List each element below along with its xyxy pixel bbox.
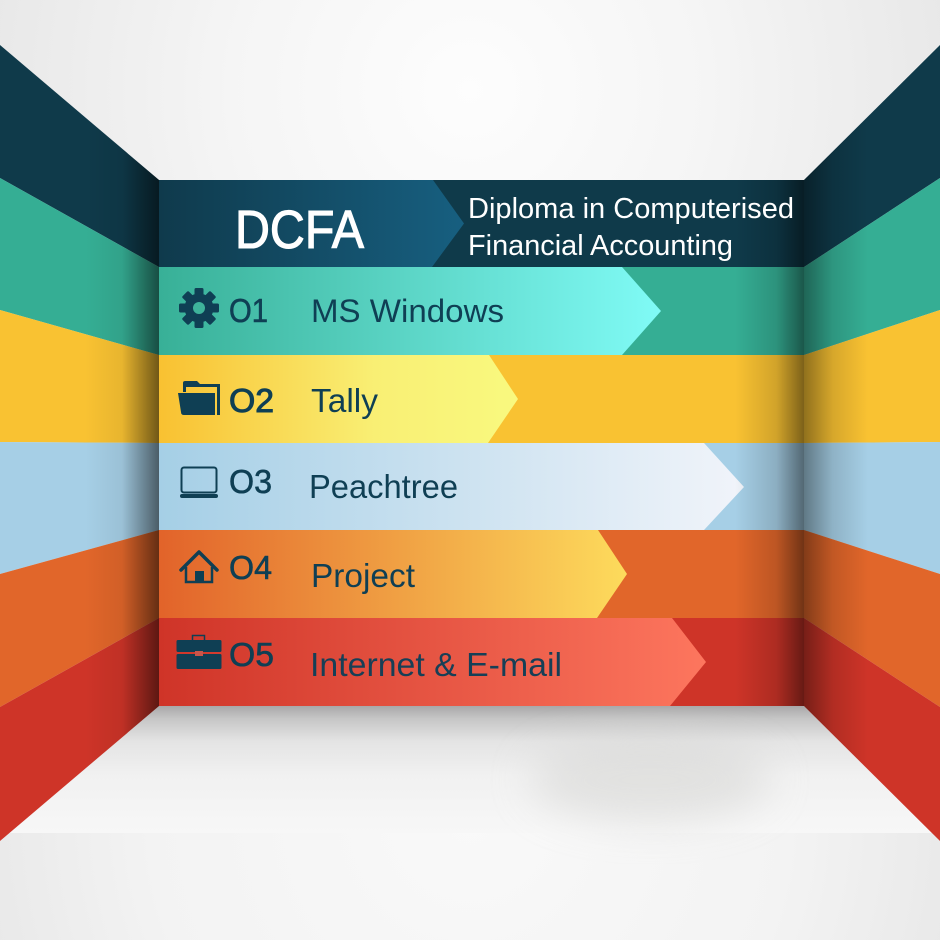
arrow 02 band bbox=[159, 355, 518, 443]
left wall with coloured stripes bbox=[0, 45, 159, 841]
row 01: MS Windows bbox=[179, 288, 504, 329]
back wall bands bbox=[159, 180, 804, 706]
number 03: O3 bbox=[229, 463, 272, 500]
label: Project: Project bbox=[311, 557, 415, 594]
icon: briefcase bbox=[176, 636, 222, 669]
corner shadow on back wall bbox=[735, 180, 804, 706]
number 05: O5 bbox=[229, 636, 274, 673]
subtitle: Diploma in Computerised bbox=[468, 193, 794, 225]
row 05: Internet and E-mail bbox=[176, 636, 562, 683]
label: MS Windows: MS Windows bbox=[311, 293, 504, 329]
floor of the room bbox=[8, 706, 932, 833]
row 04: Project bbox=[181, 549, 415, 594]
title: DCFA: DCFA bbox=[235, 200, 364, 260]
subtitle: Financial Accounting bbox=[468, 230, 733, 262]
arrow 04 band bbox=[159, 530, 627, 618]
arrow 01 band bbox=[159, 267, 661, 355]
label: Peachtree: Peachtree bbox=[309, 468, 458, 505]
arrow 03 band bbox=[159, 443, 744, 530]
label: Tally: Tally bbox=[311, 382, 378, 419]
right wall with coloured stripes bbox=[804, 45, 940, 841]
background: ceiling bbox=[0, 0, 940, 400]
number 01: O1 bbox=[229, 292, 268, 329]
icon: folder bbox=[178, 381, 220, 415]
icon: house bbox=[181, 552, 217, 582]
label: Internet & E-mail: Internet & E-mail bbox=[310, 646, 562, 683]
number 02: O2 bbox=[229, 382, 274, 419]
subtitle bbox=[468, 193, 794, 262]
background: lower ground bbox=[0, 700, 940, 940]
icon: gear bbox=[179, 288, 219, 328]
row 03: Peachtree bbox=[180, 463, 458, 505]
number 04: O4 bbox=[229, 549, 272, 586]
row 02: Tally bbox=[178, 381, 378, 419]
header arrow: DCFA bbox=[159, 180, 464, 267]
icon: laptop bbox=[180, 468, 218, 498]
arrow 05 band bbox=[159, 618, 706, 706]
